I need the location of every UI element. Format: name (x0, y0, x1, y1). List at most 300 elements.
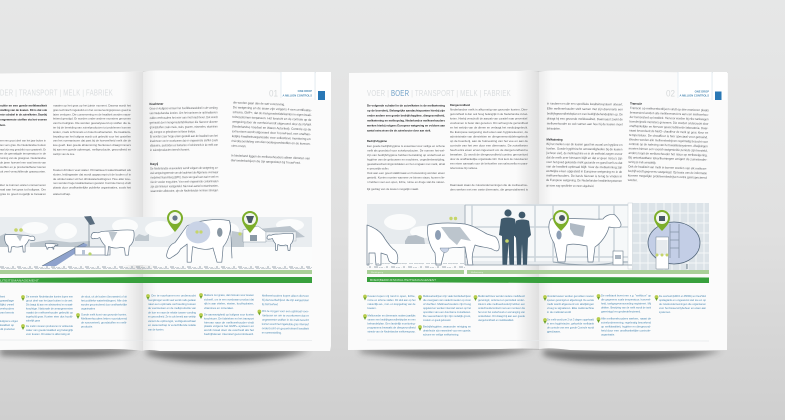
column: bedrijfshygiene: Een goede bedrijfshygiëne is essentieel voor veilige en schone (367, 144, 445, 148)
bullet column 2: voor koeien. Dit water is afkomstig uit (26, 332, 70, 336)
clouds (0, 219, 312, 265)
calf (45, 243, 58, 249)
navigation heading: DER | TRANSPORT | MELK | FABRIEK (0, 88, 113, 98)
column: gras text: de winkel water uit het drinkwaterleidingnet. Hoe aller koe- (53, 177, 131, 181)
small quality icons (14, 228, 242, 236)
column: bedrijfshygiene (367, 139, 445, 191)
column: diergezondheid: Nederlandse melk is afkomstig van gezonde koeien. Dier- (450, 108, 528, 112)
bullet column 2: desinfectie zijn essentieel voor een goede, (423, 328, 471, 332)
bullet column 1 (0, 294, 18, 331)
column: melkwinning: dat de melk zeer kiemarm blijft en dat er geen risico's zijn (546, 155, 623, 160)
column: bedrijfshygiene: en personelijke stoffen. (367, 166, 389, 170)
column: diergezondheid: voorkomen is beter dan genezen. Dit verhoogt de gezondheid (450, 121, 528, 125)
bullet column 5: vitamines en mineralen. (204, 306, 234, 310)
column: voer text: de jaren hoeveel een vast kennis van (0, 160, 46, 164)
column: gras text: bij aan een goede opbrengst, melkproductie, gezondheid en (53, 148, 131, 152)
column: krachtvoer and burgrij: in zuivelproducten terecht komen. (150, 148, 190, 152)
column: diergezondheid: bewaken. Zo wordt de diergezondheid continu gemonitord (450, 152, 528, 156)
bullet texts (0, 293, 309, 336)
column: krachtvoer and burgrij: waaronder aflatoxine, zijn de Nederlandse normen strenger. (150, 188, 219, 193)
bullet column 1: kwaliteit op (0, 323, 14, 327)
bullet column 4: en gezondheid. Ze is ook bereid aan welzijn (148, 315, 196, 319)
column: voer text: stoffen en je productiefbeter kiezen (0, 165, 46, 169)
tiled wall (632, 203, 709, 270)
bullet column 2: De meeste Nederlandse koeien lopen een (26, 294, 73, 298)
intro text: onder andere een goede bedrijfshygiëne, diergezondheid, (367, 114, 445, 118)
column: gras text: leiden, zoals schimmels en boterzuurbacteriën. De kwaliteits- (53, 130, 131, 134)
intro text (0, 104, 47, 127)
bullet column 5 (597, 294, 652, 336)
column: bedrijfshygiene: Ook aan een goed stalklimaat en huisvesting worden eisen (367, 171, 445, 175)
bullet column 2: Melkveebedrijven zijn vaak familiebedrijven (423, 294, 471, 298)
cow: right (267, 233, 293, 250)
cow: grazing large (167, 220, 232, 262)
bullet column 1: het (0, 294, 5, 298)
bullet column 1: Melkvoeder en dierenarts maken jaarlijks (368, 314, 416, 318)
page surface (0, 70, 331, 351)
farmers silhouettes (499, 209, 531, 265)
column: wetgeving: schema, GMP+, dat de mengvoederfabrikanten in eigen kwali- (233, 110, 312, 117)
bullet column 5: Alle melkveehouders werken, naast de (601, 316, 651, 320)
magazine spread: right (348, 70, 728, 351)
bullet column 1: van kennis (0, 310, 15, 314)
intro text: sultie en een goede melkkwaliteit (0, 104, 47, 108)
bullet column 6: de zuivelondernemingen die organiseren (659, 302, 706, 306)
column: gras text: Koeien drinken veel water. Klimatiseert waterkwaliteit als (53, 168, 131, 172)
milk meter (613, 251, 623, 265)
column: voer text: ruming van de grasgroei. Nederlandse (0, 156, 46, 160)
bullet column 4: in een hygiënische, gekoelde melktank (547, 322, 595, 326)
bullet column 5: die gegevens zoals temperatuur, hoeveel- (601, 298, 651, 302)
spine shading (516, 71, 539, 350)
intro text: stalling van de koeien. Dit is dat ook (0, 108, 47, 112)
column: gras text: ter bij de bereiding van zuivelproducten tot problemen kunnen (53, 126, 131, 130)
sky (0, 217, 312, 265)
header tabs and logo (281, 72, 331, 100)
bullet column 1: programma bewaakt de diergezondheid (368, 326, 416, 330)
bullet column 2: De melk in koeien produceren is voldoende (26, 324, 73, 328)
bullet column 6: onderzocht en gecontroleerd kwaliteit (262, 326, 309, 331)
one drop label (680, 90, 709, 98)
clouds (367, 214, 465, 265)
bullet column 1: natuurlijk eet-, rust- en loopgedrag van de (368, 302, 416, 306)
column: transport (628, 102, 709, 184)
bullet column 6: opslagtank en ongewenst wel toe en op (659, 298, 706, 302)
column: wetgeving: die worden gaan dan de wat voorzuiving. (233, 101, 285, 106)
page number 01: 01 (269, 88, 278, 100)
bullet column 1: ruime en schone stallen. Dit sluit aan op het (368, 298, 416, 302)
column: gras text: nen worden hoge kwaliteitseisen gesteld. Controle hierop vindt (53, 181, 131, 185)
distant trees (405, 235, 425, 244)
bullet column 6: voor het biosecuritybeheer en eisen aan (659, 306, 706, 310)
column: melkwinning: van de kwaliteit optimaal blijft. Voor de melkwinning zijn (546, 164, 623, 169)
column: diergezondheid: controle van het vee door een dierenarts. De zuivelketen (450, 144, 528, 148)
bullet column 4: Om te voorkomen en onderzocht (151, 294, 196, 298)
bullet column 1: samen een bedrijfsgezondheidsplan en een (368, 318, 416, 322)
bullet column 2: die overgaan van vader/moeder op zoon (423, 298, 471, 302)
bullet column 3: onderhoudscontract met een monteur die (478, 306, 525, 310)
column: bedrijfshygiene: gesteld. Koeien moeten wanneer ze binnen staan, kunnen lie- (367, 176, 445, 180)
column: krachtvoer and burgrij: alg. mengen en gebruikmen tot kleine brokjes. (150, 129, 196, 134)
bullet column 3: de ruwvoerteelt, grondstoffen en melk- (81, 320, 127, 324)
bullet column 2: zakelijk gras (26, 318, 41, 322)
column: voer text (0, 138, 46, 196)
bullet column 6: en samenstelling. (262, 330, 282, 335)
column: diergezondheid: ders werken met een vaste dierenarts, die gespecialiseerd is (450, 188, 528, 192)
bullet column 4: de controle van een goede Controle wordt (547, 326, 594, 330)
bullet column 5: heid, tankgegevensvoeding registreert. Mij (601, 302, 651, 306)
cow: grazing at left edge (367, 225, 398, 265)
bullet column 3: het publieke waterleidingnet. Alle drie (81, 298, 127, 302)
bullet column 4: vroeg te signaleren. Elke melkmachine (547, 306, 594, 310)
bullet column 2: ingekuild gras. Koeien eten dus hoofd- (26, 314, 73, 318)
column: wetgeving: In Nederland liggen de melkveehouders alleen diensten van (231, 153, 310, 161)
column: wetgeving: extra eisen wordt uitgevoerd door TrouwFeed, een onafhan- (232, 129, 311, 136)
intro text: op de boerderij. Belangrijke aandachtspunten hierbij zijn (367, 108, 445, 112)
column: melkwinning: draagt hij een gezonde melkkwaliteit. Daarnaast zoekt de (547, 116, 623, 121)
column: bedrijfshygiene: n hebben voor een open, lichte, ruime en droge stal die natuur- (367, 180, 445, 184)
green band: kwaliteitsmanagement: LITEITSMANAGEMENT (0, 278, 39, 282)
bullet column 6: bij diervoerbedrijven die zijn aangesloten (262, 298, 309, 302)
bullet column 6: Melkveehouders kopen alleen diervoer (262, 294, 309, 298)
bullet column 4: melk wordt afgevoerd om afwijkingen (547, 302, 594, 306)
bullet column 2: opvolden van een duurzame zuivelketen. (423, 310, 471, 314)
bullet column 1: lijkt veel (0, 302, 15, 306)
cow: milking (549, 214, 621, 262)
map pin: cow (242, 211, 258, 233)
column: transport: bedrijf wordt gegevens vastgelegd. Op basis van de informatie (628, 169, 707, 175)
column: diergezondheid (450, 103, 528, 192)
column: gras text: welzijn van de koe. (53, 152, 75, 156)
intro text: De volgende schakel in de zuivelketen is de melkwinning (367, 104, 445, 108)
column: voer text: uit veel verschillende grassoorten. (0, 169, 46, 173)
bullet column 2: krachtige. Nationale de arrangementen (26, 306, 73, 310)
column: bedrijfshygiene: zijn van bedrijfshygiëne hebben betrekking op onderhoud en (367, 153, 445, 157)
bullet column 1: ulk producten (0, 327, 15, 331)
bullet column 5: dekken. Bewijzing van de melk wordt de tank (601, 306, 652, 310)
column: melkwinning: Elke melkveehouder stelt samen met zijn dierenarts een (547, 106, 623, 111)
bullet column 5: rijk is aan vitelen, eiwten, koolhydraten, (204, 302, 254, 306)
column: krachtvoer and burgrij: Gras en kuilgras vormen het hoofdbestanddeel in de voeding (149, 106, 218, 111)
column: melkwinning: de Europese wetgeving. De Nederlandse kwaliteitssystemen (546, 178, 622, 183)
bullet column 1: grassilage (0, 298, 14, 302)
column: wetgeving: ciers ervan. (231, 144, 247, 148)
column: transport: Ook de kwaliteit van melk in boeren worden van elk melkvee- (628, 164, 707, 171)
one drop label: A MILLION CONTROLS (283, 94, 312, 98)
column: bedrijfshygiene: gewasbeschermingsmiddelen en het omgaan met melk, afval (367, 162, 445, 166)
bullet column 4 (543, 294, 595, 334)
column: krachtvoer and burgrij: grondstoffen zoals maïs, mais, granen, mineralen, vitaminen (150, 124, 218, 129)
column: voer text: raal aan het gras tot kuilgras. Om (0, 187, 46, 191)
sky (367, 204, 633, 265)
column: gras text: maaien op het gras op het juiste moment. Daarna wordt het (53, 104, 131, 108)
bullet column 2: water van goede kwaliteit erg belangrijk (26, 328, 74, 332)
column: diergezondheid: tuberculose bij melkvee. (450, 166, 478, 170)
column: diergezondheid: een eisen aanvaak voor de behoeften van salmonella en para- (450, 162, 528, 166)
column: melkwinning: wettelijke eisen opgesteld in Europese wetgeving en in de (546, 169, 622, 174)
column: diergezondheid: Diergezondheid (450, 103, 470, 107)
column: transport: Worden worden alle melkveebedrijven regelmatig bezocht voor (629, 137, 708, 144)
bullet column 3: Goede melk komt van gezonde koeien. (81, 312, 127, 316)
bullet column 6: rantsoen en om te voorkomen dat er (262, 313, 309, 318)
intro text: ten. (0, 123, 6, 127)
column: diergezondheid: Daarnaast staan de zuivelondernemingen die de melkveehou- (450, 183, 528, 187)
column: transport: worden. (628, 178, 638, 182)
bullet column 1: veehouders (0, 306, 15, 310)
page surface (348, 70, 728, 351)
illustration: farm pasture (0, 210, 312, 274)
column: wetgeving: diervoederbedrijven die zijn aangesloten bij TrouwFeed. (231, 158, 301, 165)
bullet column 2: maakt de melkveehouder gebruikt op (26, 310, 73, 314)
bullet column 5 (199, 293, 254, 336)
column: bedrijfshygiene: melk als grondstof voor zuivelproducten. De normen het wel- (367, 148, 445, 152)
column: transport: naast beoordeelt de MelO- chauffeur de melk op geur, kleur en (629, 128, 708, 135)
one drop label: ONE DROP (695, 90, 709, 94)
illustration: milking parlour: Melkwinning (471, 272, 483, 274)
cow: left standing (5, 234, 35, 252)
bullet column 3 (76, 294, 127, 328)
column: transport: kunnen mogelijke probleembedrijven extra geïnspecteerd (628, 173, 707, 180)
bullet column 2: opgeleid en werken intensief samen op het (423, 306, 471, 310)
column: transport: anders loopt de melkveehouder het risico op melkweigering. (628, 151, 708, 157)
bullet column 6: ongewenste stoffen in de melk terecht (262, 318, 309, 322)
column: krachtvoer and burgrij: zullen veehouders het voer aan met krachtvoer. Dat wordt (150, 115, 218, 120)
column: diergezondheid: keten. Hierbij verschuift de aanpak van curatief naar preventief: (450, 116, 528, 120)
bullet column 1: behandelplan. Een landelijk monitoring- (368, 322, 416, 326)
bullet column 2 (21, 294, 74, 336)
bullet column 3: productie. (81, 324, 93, 328)
column: transport: moeten binnen een vooraf vastgestelde periode zijn hersteld, (629, 146, 708, 153)
bullet column 1: Koeien lopen vrij rond in open, lichte, (368, 294, 416, 298)
column: melkwinning: Bij het melken van de koeien gaat het vooral om hygiëne en (546, 142, 623, 147)
column: wetgeving: De wetgeving en de eisen zijn volgens 4 een certificatie- (233, 105, 312, 112)
column: krachtvoer and burgrij: Er worden zeer hoge eisen gesteld aan de kwaliteit van het (150, 134, 218, 139)
farmhouse (243, 226, 305, 242)
column: krachtvoer and burgrij: Krachtvoer (149, 102, 164, 106)
column: krachtvoer and burgrij: gemaakt door mengvoederfabrikanten die hiervoor diverse (150, 120, 218, 125)
green band: bedrijfskwaliteitsmanagement: BOER|BEDRIJFSKWALITEITSMANAGEMENT (370, 278, 436, 282)
column: melkwinning: [schoon uier], de melkmachine en in de melkstal zorgen ervoor (546, 151, 622, 156)
distant hills (0, 231, 244, 247)
column: melkwinning: in runderen en die een specifieke kwaliteitssysteem uitvoert. (547, 102, 623, 106)
column: krachtvoer and burgrij: aflatoxine, pesticiden en bacteriën of schimmels in de melk van (150, 143, 218, 148)
column: melkwinning: melkveehouders. De basis hiervan is terug te vinden in (546, 173, 622, 178)
bullet column 3 (474, 294, 525, 322)
bullet column 5: zuivelonderneming, regelmatig bezoekend (601, 320, 651, 324)
bullet column 3: Melkveehouders letten voortdurend (81, 316, 127, 320)
intro text: melkwinning en melkopslag. Nederlandse melkveehouders (367, 118, 445, 122)
bullet column 1: koeien. (368, 306, 377, 310)
bullet column 3: organisaties (81, 306, 96, 310)
bullet column 4: gedaan. (547, 330, 561, 334)
bullet column 5: bedrijfsleven intensief gecontroleerd. (204, 332, 254, 336)
bullet column 4 (146, 294, 196, 332)
column: transport: neming de melk onmiddellijk. (628, 160, 656, 165)
column: krachtvoer and burgrij: zijn zijn limieten vastgesteld. Niet veel aantal contaminanten, (150, 184, 219, 188)
column: transport: Transcie op melkveebedrijven vindt op drie manieren plaats (630, 106, 709, 112)
small quality icons (449, 217, 509, 243)
bullet texts (363, 294, 706, 336)
column: transport: bemonsterd worden alle melkleveranciers aan een melkveehou- (630, 110, 709, 117)
solar pump and trough (75, 216, 110, 256)
column: krachtvoer and burgrij: krachtvoer om te voorkomen dat er ongewenste stoffen zoals (150, 138, 218, 143)
bullet column 5: De melktank levert een z.g. "melkbon" op (601, 294, 651, 298)
bullet column 6: De overheid (EDKO en PRIMA) en KeurSluit (659, 294, 706, 298)
column: gras text: sloten, leidingwater dat wordt opgepompt uit de bodem of in (53, 172, 131, 176)
parlour door frame (628, 203, 632, 269)
intro text (366, 104, 445, 132)
column: melkwinning: op soms nog specifieker en meer uitgebreid. (546, 183, 594, 188)
bullet column 4: in de melkstal wordt (547, 310, 571, 314)
spine shading (122, 72, 143, 351)
column: wetgeving: kelijke kwaliteitsorganisatie voor collectieve monitoring en (232, 134, 311, 141)
column: krachtvoer and burgrij: De Nederlandse veevoeders wordt volgens de wetgeving zo- (150, 166, 218, 170)
intro text: ongewenste stoffen via het voeren (0, 118, 47, 122)
bullet column 5: hiervan naar de melkveehouder vindt (204, 320, 254, 324)
bullet column 3: onderdelen. Dit draagt bij aan een goede (478, 314, 525, 318)
green band: kwaliteitsmanagement (0, 277, 312, 283)
bullet column 2: Bedrijfshygiëne, waaronder reiniging en (423, 324, 471, 328)
bullet column 2: schone en veilige melkwinning. (423, 332, 459, 336)
column: voer text: kter te kunnen waren conserveren (0, 183, 46, 187)
column: transport: controle op de naleving van het kwaliteitssysteem. Afwijkingen (629, 142, 708, 148)
bullet column 5: zichzelf, om te een voedzaam product dat (204, 297, 254, 301)
column: wetgeving: wetgeving door de overheid wordt uitgevoerd door de NVWA (232, 120, 312, 127)
column: gras text: bepaling van het kuilgras wordt ook gebruikt voor het opstellen (53, 134, 131, 138)
milk pipes (553, 262, 655, 265)
column: melkwinning: voor het goed gekoelde melk gezonde en goed koelt zo dat (546, 160, 622, 165)
column: melkwinning: Melkwinning (547, 137, 563, 142)
column: diergezondheid: en het welzijn van de dieren en verlaagt het medicijngebruik. (450, 126, 528, 130)
bullet column 2: Dit draagt bij aan een afwisselend en smaak- (26, 302, 73, 306)
column: voer text: eer een groot deel van het jaar buiten in (0, 138, 46, 142)
column: transport: Bij ontoelaatbare tekortkomingen weigert de zuivelonder- (628, 155, 707, 162)
bullet column 3: Hierom elke melkveehouderij hebben een (478, 302, 525, 306)
bullet column 6: Om te zorgen voor een optimaal voor- (262, 309, 309, 313)
column: melkwinning: melkveehouder zo ook samen aan hoe hij de koeien moet (547, 121, 623, 126)
column: diergezondheid: gezondheid is dan ook hoog belangrijk in de Nederlandse zuivel- (450, 112, 528, 116)
column: voer text: gras zo goed mogelijk te bewaren (0, 192, 46, 196)
column: diergezondheid: heeft extra eisen ervan ingevoerd om de diergezondheid te (450, 148, 528, 152)
bullet column 5: gereinigd en gedesinfecteerd. (601, 310, 641, 314)
column: diergezondheid: De Europese wetgeving stelt eisen aan hygiënekeuren, de (450, 130, 528, 134)
bullet column 5: plaats volgens het GMP+-systeem en (204, 324, 254, 328)
page number 02: 02 (666, 88, 675, 100)
column: transport: temperatuur. De chauffeur is hier speciaal voor getraind. (629, 133, 708, 139)
column: wetgeving: (Nederlandse Voedsel en Waren Autoriteit). Controle op de (232, 124, 311, 132)
column: krachtvoer and burgrij (149, 101, 219, 193)
bullet column 2: De veeverband zijn zijn redelijk groot, (423, 314, 471, 318)
column: bedrijfshygiene: lijk gedrag van de koeien mogelijk maakt. (367, 187, 419, 191)
bullet column 2: of dochter. Melkveehouders zijn hoog (423, 302, 471, 306)
bullet column 4: de voertoetsen en de melkproductie van (148, 306, 196, 310)
bullet column 1 (363, 294, 416, 334)
bullet column 2: modern en goed gebouwd. (423, 318, 451, 322)
bullet column 3: uiergezondheid en melkkwaliteit. (478, 318, 514, 322)
column: melkwinning (546, 102, 623, 188)
column: krachtvoer and burgrij: niet in voeder mag zitten. Voor veel ongewenste contaminaten (150, 179, 219, 184)
grass (367, 263, 465, 268)
bullet column 5: op melkkwaliteit, hygiëne en diergezond- (601, 324, 651, 328)
column: gras text: laten verlopen. Die conservering en de kwaliteit worden nauw- (53, 112, 131, 116)
column: voer text: ten vers gras. De Nederlandse bodem (0, 143, 46, 147)
column: diergezondheid: op de boerderij, aan de huisvesting van het vee en aan de (450, 139, 528, 143)
column: diergezondheid: administratie van dierziekten en diergeneesmiddelengebruik (450, 134, 528, 138)
cow: drinking (91, 230, 134, 255)
bullet column 4: de koe en naar de relatie tussen voeding (148, 310, 196, 314)
intro text: rste schakel in de zuivelketen. Daarbij (0, 113, 47, 117)
column: transport: boerderijmelk monsters genomen. Die worden onderzocht door (629, 119, 709, 126)
illustration: milking parlour: Weidegang (371, 272, 383, 274)
illustration: milking parlour (367, 203, 709, 274)
column: gras text: van het kuilgras. Die worden geanalyseerd op stoffen die la- (53, 121, 131, 125)
column: gras text (53, 104, 131, 196)
bullet column 5: krachtvoer. De fabrieken en het transport (204, 316, 254, 320)
column: transport: Transcie (630, 102, 642, 106)
column: gras text: koe geeft. Een goede afstemming hiertussen draagt immers (53, 143, 131, 147)
one drop label (283, 89, 312, 98)
map pin: milking machine (553, 210, 569, 231)
bullet column 4: spenen gereinigd en afgedroogd. De eerste (547, 298, 594, 302)
column: voer text: raal zijn erg geschikt voor grasteelt. Er (0, 147, 46, 151)
bullet column 5: Melkers zet grass, dat risicoan voor koeien (204, 293, 254, 297)
column: bedrijfshygiene: Bedrijfshygiëne (367, 139, 387, 143)
intro text: werken hierbij volgens Europese wetgeving en voldoen aan (366, 124, 445, 128)
magazine spread: left (0, 70, 331, 351)
one drop label: ONE DROP (298, 89, 312, 93)
column: melkwinning: behandelen. (547, 126, 561, 131)
column: krachtvoer and burgrij: Burgrij (150, 162, 158, 166)
column: transport: onafhankelijke en hiervoor geaccrediteerde laboratoria. Daar- (629, 124, 708, 130)
column: wetgeving: teitssystemen toepassen. Het toezicht en de controle op de (232, 115, 312, 122)
bullet column 4: De melk wordt per 2 tot 3 dagen opgehaald (547, 318, 594, 322)
column: krachtvoer and burgrij: van Nederlandse koeien. Om het rantsoen te optimaliseren (150, 110, 218, 115)
light green strips (367, 270, 709, 274)
milk tank (648, 222, 700, 269)
header tabs and logo (678, 72, 727, 100)
bullet column 4: van de koeien. (148, 328, 164, 332)
column: gras text: plaats door onafhankelijke publieke organisaties, zoals het (53, 186, 131, 190)
bullet column 4: en wetenschap is verschillende relatie (148, 323, 196, 327)
bullet column 1: steeds van de Nederlandse melkveegroep. (368, 330, 416, 334)
grass (0, 264, 312, 269)
bullet column 3: worden gecontroleerd door onafhankelijke (81, 302, 127, 306)
column: melkwinning: koelen. Goede hygiënische omstandigheden bij de koeien (546, 146, 623, 151)
bullet column 1: kuilgras te volgen (0, 319, 18, 323)
bullet column 2: groot deel van het jaar buiten in de wei. (26, 298, 73, 302)
column: diergezondheid: door de onafhankelijke organisatie GD. Ook kent de zuivelsector (450, 157, 528, 161)
bullet column 5: wordt zowel door de overheid als het (204, 328, 254, 332)
map pin: milk tank (654, 210, 670, 231)
column: gras text: gras technisch ingekuild om het conserveringsproces goed te (53, 108, 131, 112)
map pin: vet (167, 210, 183, 232)
intro text: aantal extra eisen die de zuivelsector door aan stelt. (367, 128, 431, 132)
page shadows (0, 349, 722, 363)
bullet column 6 (257, 293, 309, 335)
column: gras text: waterschap. (53, 192, 71, 196)
column: gras text: van het voerrantsoen dat past bij de hoeveelheid melk die de (53, 139, 131, 143)
bullet column 2 (418, 294, 471, 336)
bullet column 6: systemen. (659, 310, 671, 314)
bullet column 4: mengkruiger wordt veel wordt melk gedaan (148, 298, 196, 302)
column: gras text: lettend gevolgd. Er worden onder andere monsters genomen (53, 117, 131, 121)
column: wetgeving (231, 101, 313, 165)
bullet column 4: Voordat koeien worden gemolken moeten (547, 294, 594, 298)
water ditch (42, 243, 88, 266)
column: voer text: en de gematigde temperatuur in de (0, 152, 46, 156)
navigation heading: VOER | BOER | TRANSPORT | MELK | FABRIEK (367, 89, 511, 98)
bullet column 3: gereinigd, ontsmet en periodiek onder- (478, 298, 525, 302)
